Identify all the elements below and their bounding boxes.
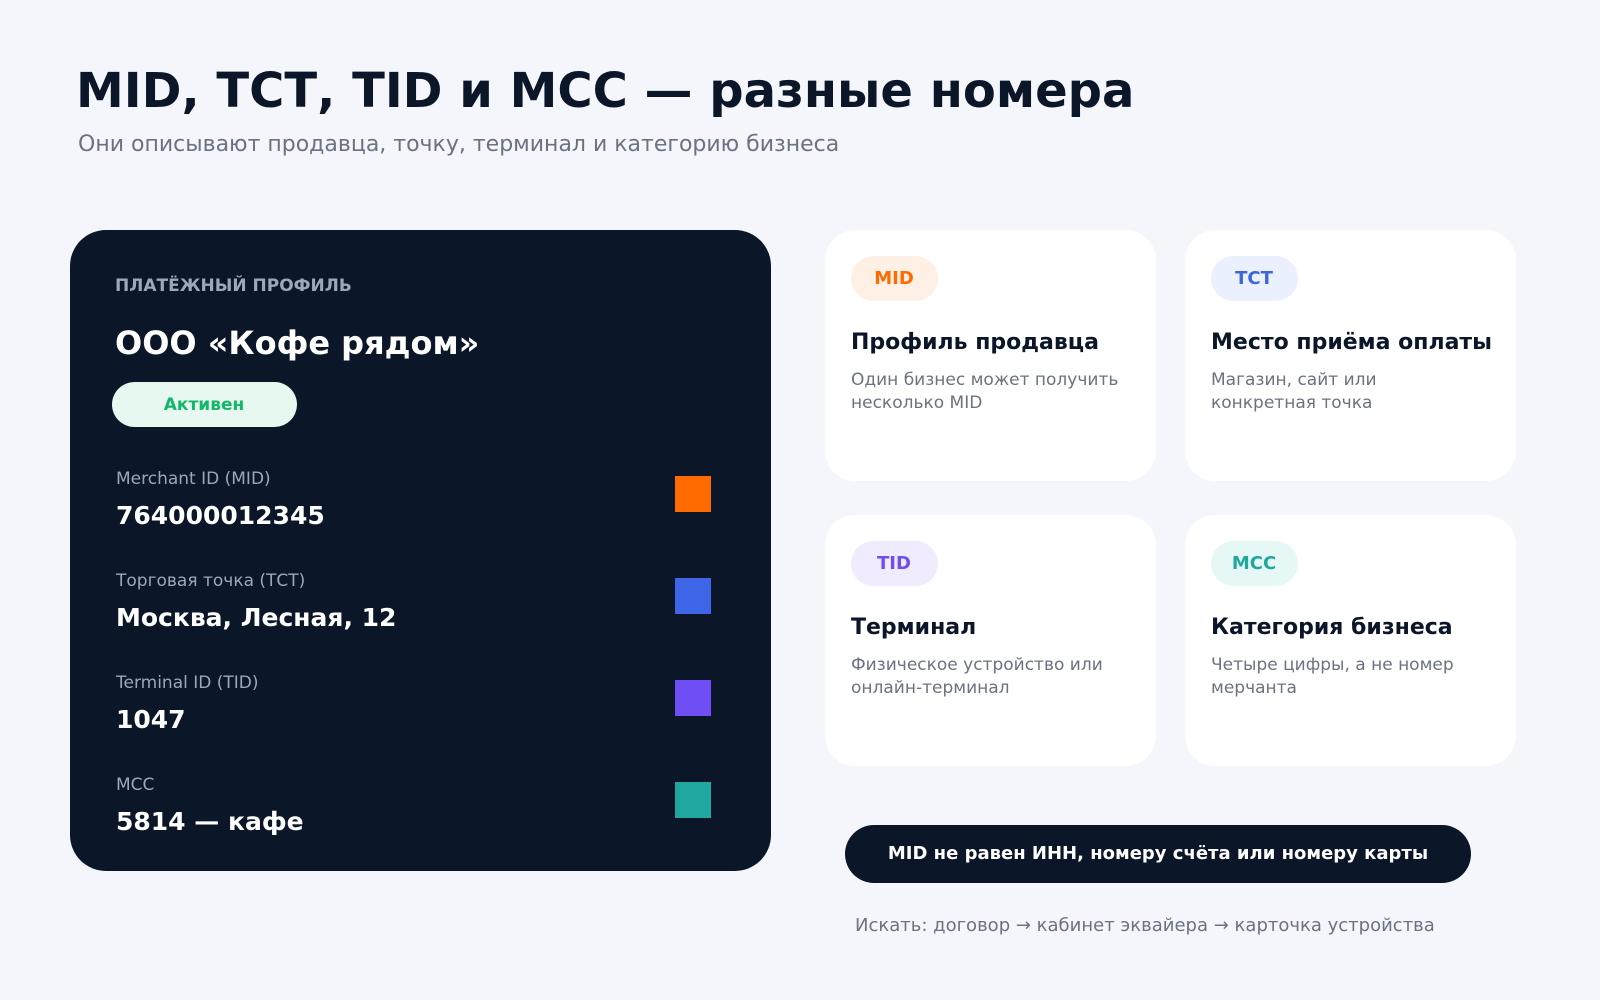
row: mcc — [116, 775, 711, 836]
panel: payment profile — [70, 230, 771, 871]
subtitle: Они описывают продавца, точку, терминал и категорию бизнеса — [78, 132, 839, 157]
company name: ООО «Кофе рядом» — [115, 324, 479, 362]
search hint: Искать: договор → кабинет эквайера → карточка устройства — [855, 915, 1435, 936]
card: TID: TID — [877, 553, 911, 574]
card: MCC: Четыре цифры, а не номер — [1211, 655, 1454, 675]
row: terminal id — [115, 673, 711, 734]
row: terminal id: 1047 — [116, 705, 186, 734]
card: TCT: Магазин, сайт или — [1211, 370, 1377, 390]
row: merchant id — [116, 469, 711, 530]
card: MID: несколько MID — [851, 393, 982, 413]
card: TCT — [1185, 230, 1516, 481]
card: TCT: конкретная точка — [1211, 393, 1372, 413]
callout: MID is not INN: MID не равен ИНН, номеру счёта или номеру карты — [888, 843, 1428, 864]
card: TID: Терминал — [851, 615, 976, 640]
row: terminal id: Terminal ID (TID) — [115, 673, 259, 693]
card: MCC: MCC — [1232, 553, 1276, 574]
card: MID — [825, 230, 1156, 481]
callout: MID is not INN — [845, 825, 1471, 883]
row: mcc: MCC — [116, 775, 154, 795]
status pill: Активен — [164, 395, 244, 415]
card: MID: Профиль продавца — [851, 330, 1099, 355]
card: MID: Один бизнес может получить — [851, 370, 1118, 390]
row: merchant id: 764000012345 — [116, 501, 325, 530]
status pill — [112, 382, 297, 427]
row: trade point — [115, 571, 711, 632]
row: trade point: Торговая точка (ТСТ) — [115, 571, 305, 591]
card: TCT: Место приёма оплаты — [1211, 330, 1492, 355]
row: trade point: Москва, Лесная, 12 — [116, 603, 396, 632]
card: MCC: Категория бизнеса — [1211, 615, 1453, 640]
card: TCT: ТСТ — [1235, 268, 1274, 289]
card: MCC: мерчанта — [1211, 678, 1297, 698]
row: mcc: 5814 — кафе — [116, 807, 304, 836]
card: MCC — [1185, 515, 1516, 766]
card: TID — [825, 515, 1156, 766]
card: TID: Физическое устройство или — [851, 655, 1103, 675]
row: merchant id: Merchant ID (MID) — [116, 469, 271, 489]
title: MID, ТСТ, TID и MCC — разные номера — [76, 63, 1134, 119]
panel label: ПЛАТЁЖНЫЙ ПРОФИЛЬ — [115, 274, 352, 296]
card: TID: онлайн-терминал — [851, 678, 1010, 698]
card: MID: MID — [874, 268, 914, 289]
